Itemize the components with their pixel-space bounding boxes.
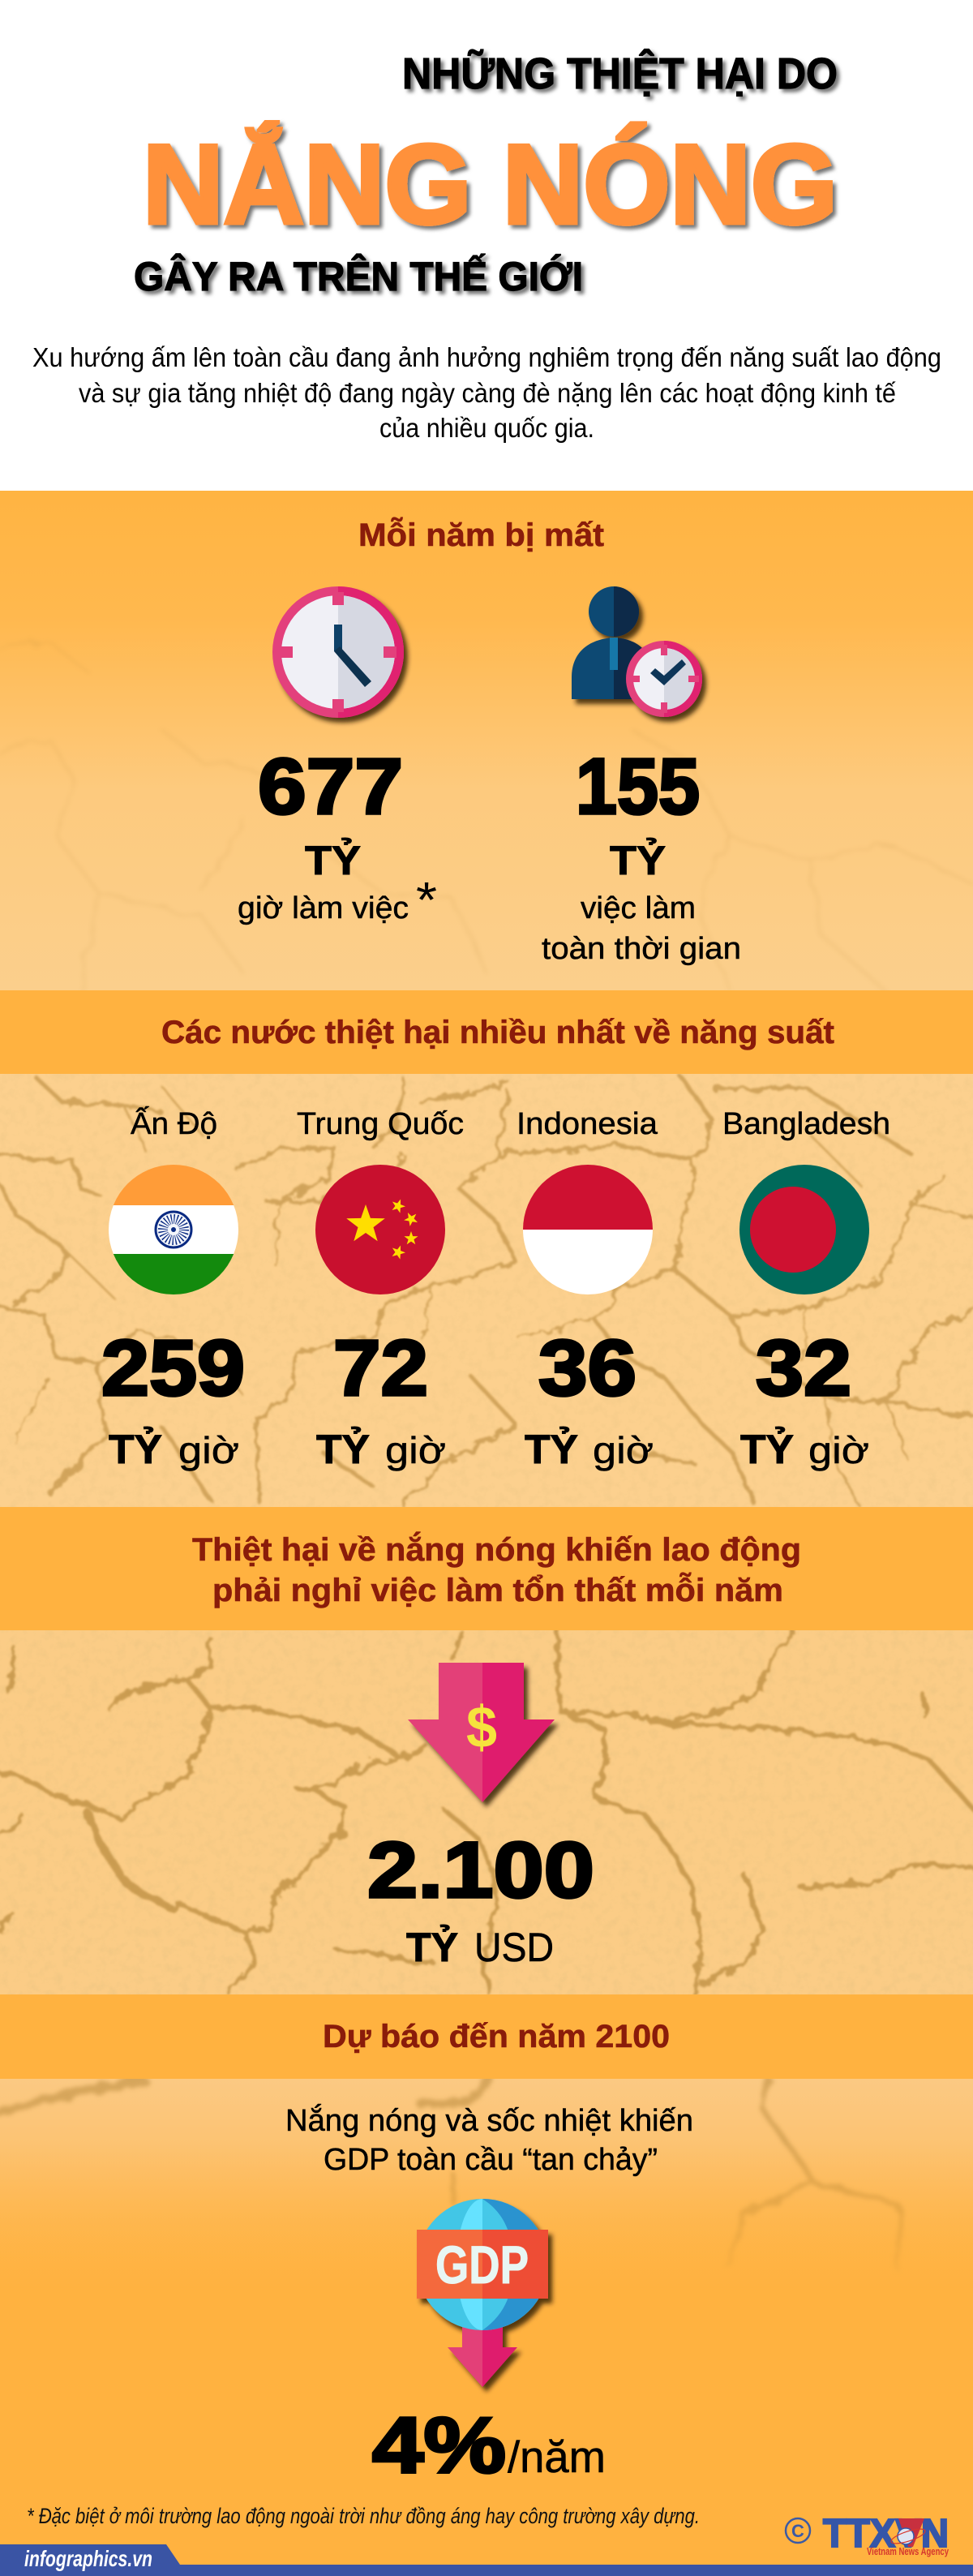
country: Ấn Độ: 259 — [101, 1324, 245, 1412]
logo: TTXVN: TTXVN — [823, 2512, 949, 2556]
flag: Ấn Độ — [109, 1165, 238, 1294]
country: Trung Quốc: giờ — [385, 1429, 446, 1471]
stat: 155 tỷ việc làm toàn thời gian: toàn thời gian — [542, 932, 741, 966]
country: Trung Quốc: Trung Quốc — [297, 1107, 464, 1141]
header band: thiệt hại về nắng nóng — [0, 1507, 973, 1630]
stat: 677 tỷ giờ làm việc: * — [416, 873, 437, 929]
country: Ấn Độ: TỶ — [109, 1427, 162, 1472]
logo: TTXVN: C — [791, 2521, 804, 2541]
stat: 155 tỷ việc làm toàn thời gian: TỶ — [610, 838, 666, 883]
country: Trung Quốc — [297, 1107, 464, 1472]
title line: nắng nóng: NẮNG NÓNG — [143, 121, 838, 247]
header band: thiệt hại về nắng nóng: phải nghỉ việc làm tổn thất mỗi năm — [212, 1571, 783, 1608]
country: Indonesia: Indonesia — [517, 1107, 658, 1141]
section heading: Mỗi năm bị mất — [358, 516, 604, 553]
intro paragraph: của nhiều quốc gia. — [379, 413, 594, 443]
header band: dự báo đến năm 2100 — [0, 1994, 973, 2079]
country: Indonesia: TỶ — [525, 1427, 578, 1472]
country: Bangladesh: TỶ — [740, 1427, 794, 1472]
header band: các nước thiệt hại: Các nước thiệt hại nhiều nhất về năng suất — [161, 1015, 834, 1050]
country: Bangladesh: giờ — [808, 1429, 869, 1471]
title line: những thiệt hại do: NHỮNG THIỆT HẠI DO — [402, 49, 838, 98]
icon: GDP globe with down arrow: GDP — [435, 2235, 529, 2295]
icon: GDP globe with down arrow — [417, 2199, 551, 2387]
page title — [134, 49, 838, 299]
flag: Bangladesh — [739, 1165, 869, 1294]
flag: Indonesia — [523, 1165, 653, 1294]
footer bar with site name: infographics.vn — [24, 2546, 152, 2571]
panel: tổn thất mỗi năm — [0, 1630, 973, 1994]
stat: 677 tỷ giờ làm việc — [238, 742, 437, 929]
subheading: GDP tan chảy — [285, 2103, 693, 2177]
country: Indonesia: 36 — [538, 1324, 637, 1412]
title line: gây ra trên thế giới: GÂY RA TRÊN THẾ GIỚI — [134, 254, 583, 299]
country: Ấn Độ: Ấn Độ — [131, 1106, 217, 1141]
country: Bangladesh: Bangladesh — [722, 1107, 890, 1141]
stat: 155 tỷ việc làm toàn thời gian — [542, 742, 741, 966]
subheading: GDP tan chảy: GDP toàn cầu “tan chảy” — [324, 2143, 658, 2177]
stat: 677 tỷ giờ làm việc: TỶ — [305, 838, 361, 883]
flag: Trung Quốc — [315, 1165, 445, 1294]
panel: dự báo đến năm 2100 — [0, 2079, 973, 2576]
icon: down arrow with dollar: $ — [466, 1695, 497, 1760]
header band: thiệt hại về nắng nóng: Thiệt hại về nắng nóng khiến lao động — [192, 1531, 801, 1568]
icon: down arrow with dollar — [408, 1663, 555, 1802]
country: Ấn Độ — [101, 1106, 245, 1472]
country: Trung Quốc: TỶ — [316, 1427, 370, 1472]
intro paragraph — [32, 342, 941, 443]
stat: 2.100 tỷ USD — [367, 1826, 594, 1970]
stat: 155 tỷ việc làm toàn thời gian: việc làm — [581, 891, 696, 925]
stat: 4% mỗi năm: /năm — [508, 2432, 606, 2482]
stat: 2.100 tỷ USD: USD — [474, 1925, 554, 1970]
stat: 677 tỷ giờ làm việc: giờ làm việc — [238, 891, 409, 925]
stat: 4% mỗi năm — [372, 2401, 606, 2489]
panel: các nước thiệt hại nhiều nhất — [0, 1074, 973, 1507]
country: Trung Quốc: 72 — [333, 1324, 428, 1412]
stat: 2.100 tỷ USD: 2.100 — [367, 1826, 594, 1914]
icon: person with clock — [572, 586, 702, 717]
country: Bangladesh: 32 — [756, 1324, 851, 1412]
intro paragraph: và sự gia tăng nhiệt độ đang ngày càng đè nặng lên các hoạt động kinh tế — [79, 378, 896, 408]
country: Indonesia — [517, 1107, 658, 1472]
stat: 155 tỷ việc làm toàn thời gian: 155 — [576, 742, 700, 831]
subheading: GDP tan chảy: Nắng nóng và sốc nhiệt khiến — [285, 2103, 693, 2138]
footnote: * Đặc biệt ở môi trường lao động ngoài trời như đồng áng hay công trường xây dựng. — [27, 2504, 700, 2528]
country: Bangladesh — [722, 1107, 890, 1472]
panel: mỗi năm bị mất — [0, 491, 973, 990]
stat: 2.100 tỷ USD: TỶ — [406, 1925, 458, 1970]
stat: 4% mỗi năm: 4% — [372, 2401, 506, 2489]
country: Ấn Độ: giờ — [178, 1429, 239, 1471]
header band: các nước thiệt hại — [0, 990, 973, 1074]
stat: 677 tỷ giờ làm việc: 677 — [258, 742, 403, 831]
country: Indonesia: giờ — [593, 1429, 654, 1471]
footer bar with site name — [0, 2544, 973, 2576]
header band: dự báo đến năm 2100: Dự báo đến năm 2100 — [323, 2019, 670, 2054]
icon: clock — [272, 586, 404, 718]
